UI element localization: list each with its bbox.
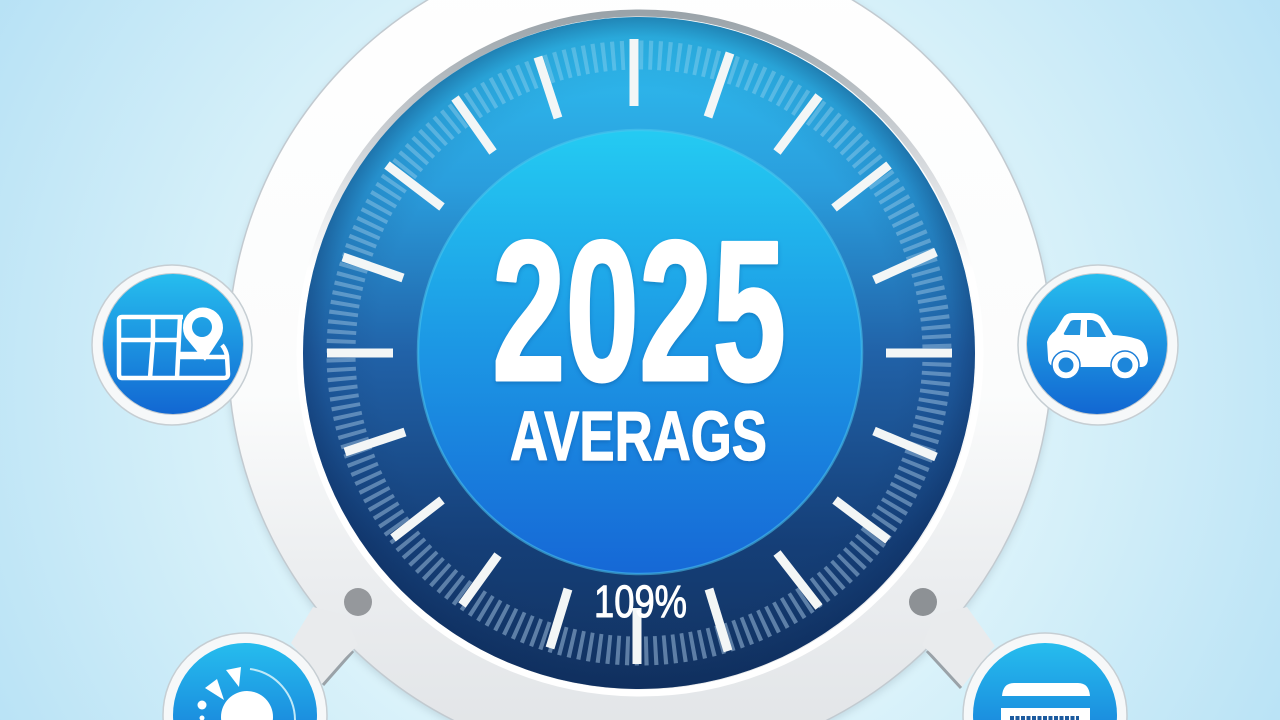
major ticks bbox=[327, 39, 952, 664]
bolt right bbox=[909, 588, 937, 616]
subheading: AVERAGS bbox=[510, 397, 767, 475]
icon badge: map bbox=[92, 265, 252, 425]
bolt left bbox=[344, 588, 372, 616]
percentage label: 109% bbox=[594, 576, 687, 627]
icon: car bbox=[1047, 313, 1148, 379]
minor ticks bbox=[341, 55, 937, 651]
icon: map with pin bbox=[119, 317, 228, 378]
icon: gauge dial bbox=[198, 667, 295, 720]
icon: card bbox=[1001, 683, 1090, 720]
inner face bbox=[418, 130, 862, 574]
icon badge: payment card bbox=[963, 633, 1127, 720]
dial bbox=[303, 17, 975, 689]
heading: year: 2025 bbox=[492, 200, 786, 423]
icon badge: car bbox=[1018, 265, 1178, 425]
icon badge: gauge bbox=[163, 633, 327, 720]
white gauge bezel with arms bbox=[227, 0, 1053, 720]
